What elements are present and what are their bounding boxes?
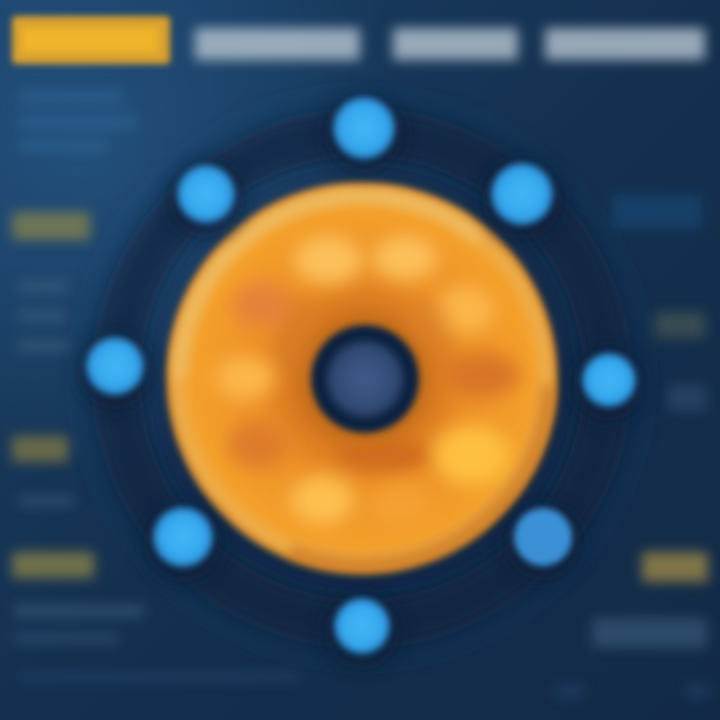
left column: block 2 [12,436,74,507]
title text placeholder [195,28,705,60]
node: upper right [482,160,562,240]
node: upper left [168,162,244,238]
node: lower right [505,505,581,581]
left column: block 3 [12,552,144,644]
central orange wheel [150,174,574,598]
node: lower left [144,504,222,582]
wheel segments [215,236,520,525]
node: right [573,349,645,421]
orbit rings [77,93,647,663]
node: left [77,334,153,410]
wheel rim highlight [180,197,548,565]
left column: top note [18,90,138,152]
right column: block 1 [612,195,706,411]
heading badge [12,16,170,64]
footer text placeholder [20,672,710,698]
node: top [324,94,404,174]
node: bottom [324,594,400,670]
central hub [303,317,427,441]
left column: block 1 [12,212,90,352]
right column: block 2 [592,552,708,648]
